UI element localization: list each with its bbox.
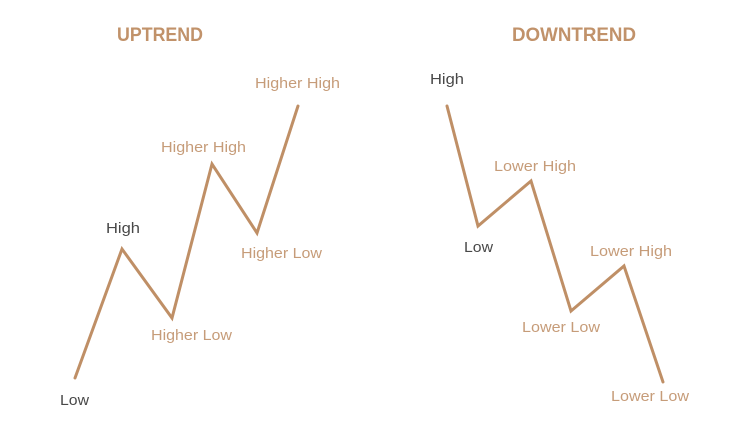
label: higher low 1: Higher Low (151, 327, 232, 344)
label: high: High (106, 220, 140, 237)
heading: uptrend: UPTREND (117, 24, 203, 46)
label: low: Low (60, 392, 89, 409)
line chart: uptrend zigzag (75, 106, 298, 378)
label: lower low 1: Lower Low (522, 319, 600, 336)
label: higher high 2: Higher High (255, 75, 340, 92)
panel: uptrend (60, 24, 340, 409)
label: higher high 1: Higher High (161, 139, 246, 156)
label: lower high 1: Lower High (494, 158, 576, 175)
label: higher low 2: Higher Low (241, 245, 322, 262)
heading: downtrend: DOWNTREND (512, 24, 636, 46)
panel: downtrend (430, 24, 689, 405)
label: high: High (430, 71, 464, 88)
label: low: Low (464, 239, 493, 256)
label: lower high 2: Lower High (590, 243, 672, 260)
label: lower low 2: Lower Low (611, 388, 689, 405)
line chart: downtrend zigzag (447, 106, 663, 382)
